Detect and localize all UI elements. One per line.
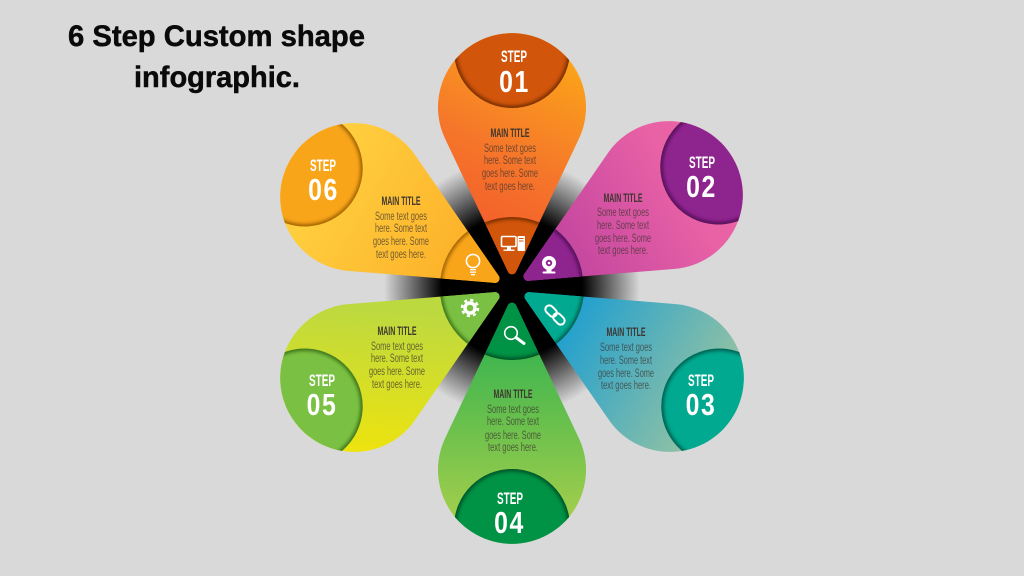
panel: petal step 1	[438, 33, 586, 274]
step 5 label: 05	[307, 387, 337, 422]
step 2 label: 02	[686, 169, 717, 204]
step 3 label: 03	[686, 387, 716, 422]
text block step 5: text goes here.	[372, 379, 422, 391]
step 1 label	[499, 47, 530, 99]
text block step 1: here. Some text	[484, 155, 537, 167]
text block step 1: goes here. Some	[482, 168, 538, 180]
step 5 label	[307, 371, 337, 422]
step 6 label: STEP	[310, 156, 336, 175]
text block step 3: Some text goes	[600, 342, 652, 354]
icon: light bulb	[466, 254, 480, 275]
title: 6 Step Custom shape	[68, 20, 365, 53]
text block step 5: here. Some text	[371, 353, 424, 365]
icon: magnifying glass	[505, 327, 524, 344]
text block step 1: Some text goes	[484, 143, 536, 155]
step 6 label	[308, 156, 339, 207]
text block step 2	[595, 193, 651, 257]
panel: petal step 6	[280, 123, 500, 283]
title: infographic.	[134, 61, 300, 94]
text block step 2: text goes here.	[598, 245, 648, 257]
step 3 label: STEP	[688, 371, 714, 390]
text block step 4: MAIN TITLE	[494, 389, 533, 401]
icon: webcam	[542, 256, 556, 274]
text block step 5: goes here. Some	[369, 366, 425, 378]
text block step 6: here. Some text	[375, 223, 428, 235]
step 4 label: STEP	[497, 489, 523, 508]
panel: petal step 2	[523, 121, 743, 281]
text block step 1: MAIN TITLE	[490, 128, 530, 140]
text block step 6	[373, 196, 429, 261]
step 4 label	[494, 489, 525, 540]
icon: computer	[502, 236, 525, 251]
text block step 4	[485, 389, 541, 454]
icon: chain link	[544, 304, 566, 326]
text block step 6: text goes here.	[376, 249, 426, 261]
text block step 3	[598, 327, 654, 392]
text block step 4: Some text goes	[487, 404, 539, 416]
text block step 5: Some text goes	[371, 341, 423, 353]
step 4 label: 04	[494, 505, 525, 540]
text block step 2: goes here. Some	[595, 233, 651, 245]
text block step 4: goes here. Some	[485, 430, 541, 442]
dark radial burst behind petals	[384, 159, 640, 415]
text block step 4: here. Some text	[487, 416, 540, 428]
text block step 6: goes here. Some	[373, 236, 429, 248]
text block step 6: MAIN TITLE	[382, 196, 421, 208]
text block step 3: MAIN TITLE	[606, 327, 646, 339]
text block step 2: Some text goes	[597, 207, 649, 219]
step 5 label: STEP	[309, 371, 335, 390]
text block step 3: text goes here.	[601, 380, 651, 392]
step 6 label: 06	[308, 172, 339, 207]
step 2 label: STEP	[689, 153, 715, 172]
text block step 1: text goes here.	[485, 181, 535, 193]
title	[68, 20, 365, 94]
step 3 label	[686, 371, 716, 422]
panel: petal step 5	[280, 292, 500, 452]
text block step 4: text goes here.	[488, 442, 538, 454]
text block step 6: Some text goes	[375, 211, 427, 223]
text block step 2: here. Some text	[597, 220, 650, 232]
step 1 label: STEP	[501, 47, 527, 66]
icon: gear	[462, 300, 478, 316]
text block step 3: here. Some text	[600, 355, 653, 367]
step 1 label: 01	[499, 64, 530, 99]
panel: petal step 4	[438, 302, 586, 544]
text block step 3: goes here. Some	[598, 368, 654, 380]
step 2 label	[686, 153, 717, 204]
text block step 2: MAIN TITLE	[604, 193, 643, 205]
panel: petal step 3	[524, 292, 744, 452]
text block step 1	[482, 128, 538, 193]
text block step 5	[369, 326, 425, 391]
text block step 5: MAIN TITLE	[378, 326, 417, 338]
